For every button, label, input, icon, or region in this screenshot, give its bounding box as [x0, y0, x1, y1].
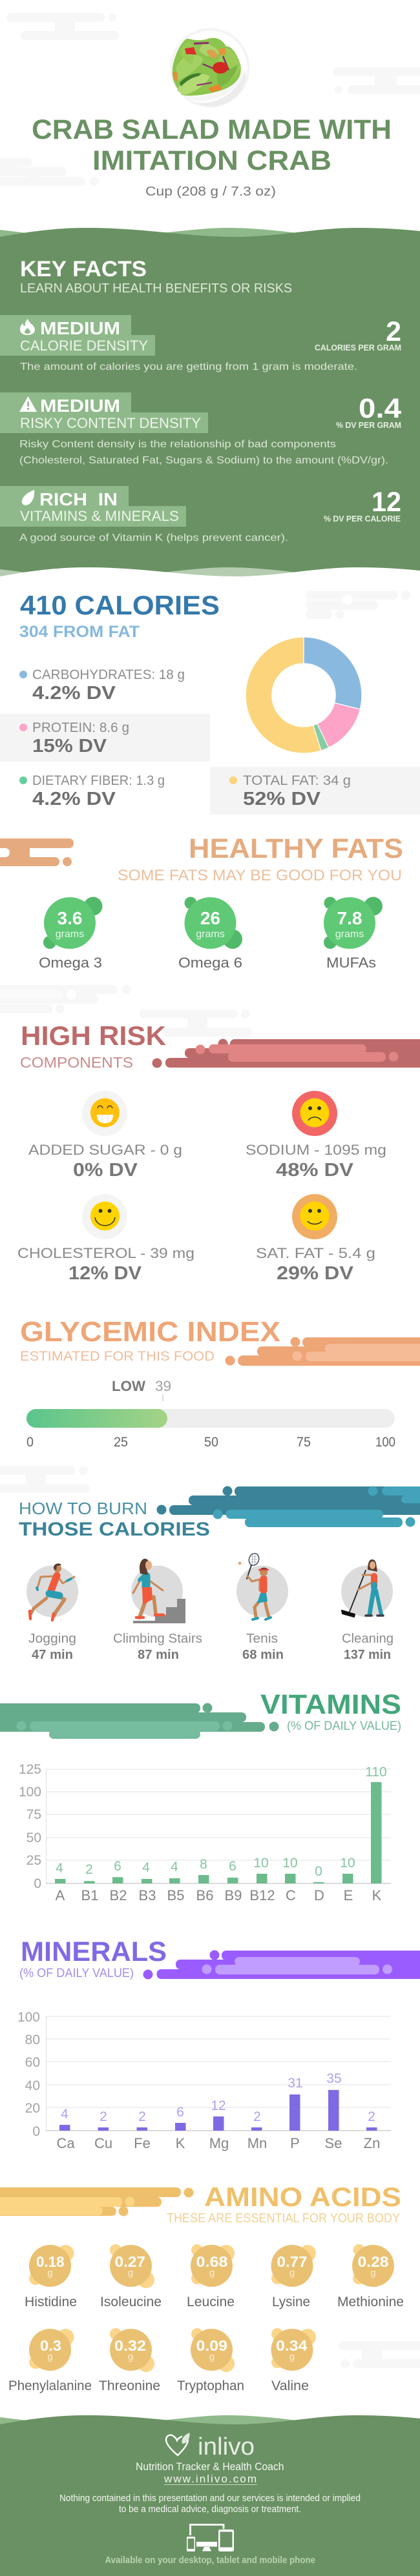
fact: calorie density: MEDIUM: [40, 318, 120, 338]
fact: calorie density: CALORIES PER GRAM: [315, 343, 401, 352]
panel: high risk components: [17, 1020, 420, 1284]
cholesterol: CHOLESTEROL - 39 mg: [17, 1245, 194, 1261]
minerals header graphic: [143, 1951, 420, 1979]
legend: carbohydrates: 4.2% DV: [32, 683, 116, 704]
sodium: SODIUM - 1095 mg: [246, 1142, 386, 1158]
calories heading: 410 CALORIES: [20, 590, 220, 620]
calories heading: [19, 590, 220, 641]
fact: calorie density: CALORIE DENSITY: [20, 338, 148, 354]
fact: risky content density: (Cholesterol, Saturated Fat, Sugars & Sodium) to the amount (%DV/gr).: [19, 455, 388, 466]
vitamins header graphic: [0, 1703, 279, 1739]
activity: climbing stairs: [131, 1559, 185, 1623]
glycemic header graphic: [225, 1337, 420, 1366]
icon: woman on stairs: [133, 1559, 185, 1623]
panel: how to burn those calories: [19, 1486, 420, 1662]
legend: dietary fiber: 4.2% DV: [32, 789, 116, 809]
high risk heading: [20, 1020, 166, 1071]
tagline: Nutrition Tracker & Health Coach: [136, 2460, 284, 2473]
bar chart: minerals: Zn: [364, 2135, 380, 2151]
bar chart: vitamins: B3: [139, 1887, 156, 1903]
bar chart: vitamins: C: [286, 1887, 296, 1903]
sodium: [246, 1091, 386, 1181]
bar chart: vitamins: 0: [315, 1864, 322, 1879]
amino: isoleucine: [100, 2244, 162, 2309]
panel: calories: [0, 590, 420, 815]
omega 6: [178, 897, 242, 971]
bar chart: minerals: Ca: [56, 2135, 75, 2151]
icon: sad face: [300, 1099, 330, 1127]
amino: valine: [271, 2328, 316, 2393]
high risk heading: COMPONENTS: [20, 1054, 133, 1071]
serving size: Cup (208 g / 7.3 oz): [145, 185, 276, 199]
amino: valine: 0.34: [276, 2337, 308, 2354]
mufas: MUFAs: [326, 955, 376, 971]
sodium: 48% DV: [276, 1160, 354, 1181]
amino: isoleucine: 0.27: [115, 2253, 145, 2270]
activity: jogging: [26, 1563, 78, 1620]
amino: histidine: g: [47, 2267, 53, 2278]
disclaimer: to be a medical advice, diagnosis or treatment.: [119, 2504, 301, 2515]
bar chart: vitamins: 100: [19, 1785, 41, 1800]
bar chart: vitamins: A: [56, 1887, 65, 1903]
amino heading: THESE ARE ESSENTIAL FOR YOUR BODY: [167, 2211, 400, 2226]
omega 6: grams: [196, 929, 225, 940]
title: [32, 114, 392, 176]
minerals heading: [19, 1936, 167, 1980]
bar chart: minerals: 6: [176, 2105, 184, 2120]
legend: total fat: 52% DV: [243, 789, 321, 809]
amino: valine: Valine: [271, 2378, 309, 2393]
fact: rich in vitamins and minerals: % DV PER CALORIE: [324, 514, 401, 523]
bar chart: vitamins: E: [344, 1887, 353, 1903]
bar chart: vitamins: 110: [365, 1765, 387, 1780]
bar chart: vitamins: 4: [171, 1860, 178, 1874]
glycemic scale bar: 100: [375, 1435, 395, 1450]
legend: total fat: TOTAL FAT: 34 g: [243, 773, 351, 788]
bar chart: vitamins: 10: [340, 1856, 355, 1871]
amino: phenylalanine: [8, 2329, 92, 2393]
amino: tryptophan: g: [209, 2351, 215, 2362]
glycemic value: LOW: [112, 1378, 145, 1394]
bar chart: minerals: 4: [61, 2107, 68, 2122]
bar chart: vitamins: 10: [253, 1856, 269, 1871]
activity labels: 137 min: [344, 1648, 391, 1662]
amino: histidine: Histidine: [25, 2295, 77, 2309]
fact: calorie density: [0, 315, 401, 372]
title: CRAB SALAD MADE WITH: [32, 114, 392, 145]
website: www.inlivo.com: [163, 2473, 257, 2485]
bar chart: minerals: Se: [325, 2135, 342, 2151]
amino: threonine: Threonine: [99, 2378, 160, 2393]
bar chart: minerals: 31: [288, 2076, 303, 2091]
fact: risky content density: % DV PER GRAM: [336, 420, 401, 430]
amino: lysine: Lysine: [272, 2295, 310, 2309]
saturated fat: 29% DV: [277, 1263, 354, 1284]
bar chart: minerals: 100: [17, 2010, 40, 2025]
key facts heading: LEARN ABOUT HEALTH BENEFITS OR RISKS: [20, 281, 292, 296]
fact: risky content density: RISKY CONTENT DENSITY: [20, 415, 201, 431]
icon: jogger: [30, 1563, 74, 1620]
omega 3: Omega 3: [39, 955, 102, 971]
omega 6: 26: [200, 908, 220, 928]
panel: amino acids: [0, 2182, 404, 2393]
activity: tennis: [236, 1552, 288, 1619]
bar chart: minerals: 40: [25, 2078, 40, 2093]
activity labels: 87 min: [138, 1648, 179, 1662]
amino: leucine: g: [209, 2267, 215, 2278]
bar chart: vitamins: 10: [282, 1856, 298, 1871]
amino header graphic: [0, 2187, 194, 2216]
inlivo logo: [166, 2433, 255, 2460]
bar chart: vitamins: 6: [114, 1859, 121, 1874]
amino: phenylalanine: 0.3: [40, 2337, 61, 2354]
glycemic heading: GLYCEMIC INDEX: [20, 1316, 280, 1348]
bar chart: minerals: [17, 2010, 391, 2151]
amino: threonine: g: [128, 2351, 133, 2362]
amino: methionine: Methionine: [337, 2295, 404, 2309]
icon: person sweeping: [342, 1559, 383, 1617]
amino: valine: g: [289, 2351, 295, 2362]
activity labels: [28, 1632, 394, 1662]
activity labels: Climbing Stairs: [113, 1632, 202, 1646]
availability note: Available on your desktop, tablet and mobile phone: [105, 2555, 315, 2566]
icon: salad bowl: [172, 30, 248, 106]
cholesterol: [17, 1194, 194, 1284]
panel: vitamins: [0, 1689, 401, 1903]
omega 3: grams: [56, 929, 84, 940]
mufas: 7.8: [337, 908, 362, 928]
inlivo logo: inlivo: [198, 2433, 255, 2460]
activity labels: Cleaning: [342, 1632, 394, 1646]
amino: leucine: [187, 2244, 235, 2309]
bar chart: minerals: K: [176, 2135, 185, 2151]
omega 3: 3.6: [58, 908, 82, 928]
glycemic scale bar: 25: [114, 1435, 128, 1450]
glycemic scale bar: 50: [204, 1435, 218, 1450]
bar chart: minerals: 12: [211, 2098, 226, 2113]
bar chart: vitamins: 25: [26, 1853, 41, 1868]
icon: mild smile: [300, 1202, 330, 1230]
bar chart: vitamins: K: [372, 1887, 382, 1903]
burn header graphic: [156, 1486, 420, 1527]
fact: rich in vitamins and minerals: A good source of Vitamin K (helps prevent cancer).: [19, 532, 288, 543]
bar chart: minerals: P: [290, 2135, 300, 2151]
fact: rich in vitamins and minerals: [0, 486, 401, 543]
bar chart: vitamins: D: [314, 1887, 324, 1903]
healthy fats heading: SOME FATS MAY BE GOOD FOR YOU: [118, 867, 402, 884]
healthy fats heading: HEALTHY FATS: [189, 833, 403, 864]
activity labels: Tenis: [246, 1632, 278, 1646]
panel: healthy fats: [0, 833, 403, 971]
added sugar: ADDED SUGAR - 0 g: [28, 1142, 182, 1158]
legend: dietary fiber: [19, 773, 165, 809]
bar chart: minerals: Mg: [209, 2135, 229, 2151]
burn heading: [19, 1499, 210, 1540]
key facts heading: KEY FACTS: [20, 257, 147, 281]
bar chart: minerals: Mn: [247, 2135, 267, 2151]
cholesterol: 12% DV: [68, 1263, 142, 1284]
added sugar: [28, 1091, 182, 1181]
bar chart: minerals: 2: [100, 2109, 107, 2124]
glycemic scale bar: [26, 1409, 395, 1450]
bar chart: vitamins: B9: [225, 1887, 242, 1903]
fact: risky content density: 0.4: [359, 393, 401, 424]
bar chart: minerals: 0: [32, 2124, 40, 2139]
panel: minerals: [17, 1936, 420, 2151]
amino: methionine: g: [370, 2267, 376, 2278]
activity labels: 47 min: [32, 1648, 73, 1662]
omega 3: [39, 897, 102, 971]
legend: protein: [19, 720, 129, 756]
fact: calorie density: The amount of calories you are getting from 1 gram is moderate.: [20, 361, 357, 372]
bar chart: minerals: 20: [25, 2101, 40, 2116]
key facts heading: [20, 257, 292, 296]
amino: histidine: 0.18: [36, 2253, 65, 2270]
bar chart: vitamins: 50: [26, 1831, 41, 1845]
title: IMITATION CRAB: [92, 145, 331, 176]
healthy fats header graphic: [0, 838, 74, 866]
vitamins heading: VITAMINS: [260, 1689, 401, 1720]
bar chart: vitamins: 0: [34, 1876, 41, 1891]
glycemic heading: [20, 1316, 280, 1364]
legend: protein: 15% DV: [32, 736, 107, 756]
amino: methionine: 0.28: [358, 2253, 389, 2270]
fact: calorie density: 2: [386, 316, 401, 347]
vitamins heading: [260, 1689, 401, 1733]
icon: grinning face: [90, 1099, 120, 1127]
bar chart: minerals: 35: [326, 2071, 342, 2086]
panel: glycemic index: [20, 1316, 420, 1450]
amino: threonine: [99, 2328, 160, 2393]
activity labels: 68 min: [242, 1648, 284, 1662]
bar chart: minerals: Cu: [94, 2135, 112, 2151]
minerals heading: MINERALS: [21, 1936, 167, 1967]
icon: flame: [20, 319, 35, 335]
icon: tennis player: [238, 1552, 271, 1619]
icon: smiling face: [90, 1202, 120, 1230]
icon: warning triangle: [19, 396, 37, 412]
saturated fat: [256, 1194, 375, 1284]
bar chart: vitamins: B2: [110, 1887, 127, 1903]
omega 6: Omega 6: [178, 955, 242, 971]
added sugar: 0% DV: [73, 1160, 138, 1181]
bar chart: minerals: 2: [368, 2109, 375, 2124]
icon: leaf: [22, 490, 34, 505]
amino: isoleucine: Isoleucine: [100, 2295, 162, 2309]
amino: tryptophan: Tryptophan: [177, 2378, 244, 2393]
legend: carbohydrates: [19, 667, 185, 704]
bar chart: minerals: 80: [25, 2033, 40, 2047]
glycemic scale bar: 75: [297, 1435, 311, 1450]
minerals heading: (% OF DAILY VALUE): [19, 1967, 134, 1980]
high risk heading: HIGH RISK: [21, 1020, 166, 1051]
glycemic value: [112, 1378, 171, 1401]
bar chart: vitamins: 125: [19, 1762, 41, 1777]
amino: phenylalanine: g: [47, 2351, 53, 2362]
amino: lysine: [271, 2245, 316, 2309]
bar chart: vitamins: 75: [26, 1807, 41, 1822]
bar chart: vitamins: 2: [85, 1862, 93, 1877]
legend: protein: PROTEIN: 8.6 g: [32, 720, 129, 735]
legend: carbohydrates: CARBOHYDRATES: 18 g: [32, 667, 185, 682]
legend: dietary fiber: DIETARY FIBER: 1.3 g: [32, 773, 165, 788]
donut chart: [246, 637, 362, 753]
burn heading: HOW TO BURN: [19, 1499, 147, 1518]
amino heading: AMINO ACIDS: [204, 2182, 401, 2212]
glycemic scale bar: 0: [26, 1435, 34, 1450]
calories heading: 304 FROM FAT: [19, 623, 140, 641]
amino: tryptophan: 0.09: [196, 2337, 227, 2354]
amino: threonine: 0.32: [114, 2337, 146, 2354]
bar chart: vitamins: B1: [81, 1887, 98, 1903]
bar chart: vitamins: B12: [249, 1887, 275, 1903]
legend: total fat: [229, 773, 351, 809]
bar chart: minerals: Fe: [134, 2135, 151, 2151]
icon: devices: [187, 2525, 234, 2551]
bar chart: vitamins: 6: [229, 1859, 236, 1874]
amino: tryptophan: [177, 2328, 244, 2393]
glycemic value: 39: [155, 1378, 171, 1394]
bar chart: vitamins: 4: [56, 1861, 63, 1876]
amino: phenylalanine: Phenylalanine: [8, 2378, 92, 2393]
bar chart: minerals: 2: [253, 2109, 261, 2124]
amino heading: [167, 2182, 401, 2226]
panel: key facts: [0, 228, 420, 581]
disclaimer: [59, 2493, 361, 2515]
amino: leucine: 0.68: [196, 2253, 228, 2270]
fact: risky content density: Risky Content density is the relationship of bad components: [19, 439, 336, 450]
bar chart: vitamins: B6: [196, 1887, 213, 1903]
healthy fats heading: [118, 833, 403, 884]
burn heading: THOSE CALORIES: [19, 1519, 210, 1540]
fact: rich in vitamins and minerals: RICH IN: [39, 489, 118, 509]
mufas: grams: [335, 929, 364, 940]
bar chart: vitamins: 8: [200, 1857, 207, 1872]
bar chart: vitamins: 4: [142, 1860, 150, 1875]
amino: leucine: Leucine: [187, 2295, 235, 2309]
activity labels: Jogging: [28, 1632, 76, 1646]
glycemic heading: ESTIMATED FOR THIS FOOD: [20, 1349, 215, 1364]
fact: rich in vitamins and minerals: VITAMINS & MINERALS: [20, 508, 179, 524]
amino: isoleucine: g: [128, 2267, 133, 2278]
amino: methionine: [337, 2244, 404, 2309]
bar chart: vitamins: B5: [167, 1887, 184, 1903]
bar chart: minerals: 2: [138, 2109, 146, 2124]
fact: risky content density: MEDIUM: [40, 396, 120, 416]
bar chart: minerals: 60: [25, 2055, 40, 2070]
amino: lysine: g: [289, 2267, 295, 2278]
saturated fat: SAT. FAT - 5.4 g: [256, 1245, 375, 1261]
bar chart: vitamins: [19, 1762, 391, 1903]
footer: [0, 2415, 420, 2576]
fact: rich in vitamins and minerals: 12: [372, 487, 401, 518]
fact: risky content density: [0, 392, 401, 466]
vitamins heading: (% OF DAILY VALUE): [287, 1719, 401, 1733]
activity: cleaning: [341, 1559, 393, 1618]
mufas: [324, 897, 383, 971]
amino: lysine: 0.77: [277, 2253, 308, 2270]
disclaimer: Nothing contained in this presentation and our services is intended or implied: [59, 2493, 361, 2504]
amino: histidine: [25, 2245, 77, 2309]
high risk header graphic: [152, 1039, 420, 1068]
